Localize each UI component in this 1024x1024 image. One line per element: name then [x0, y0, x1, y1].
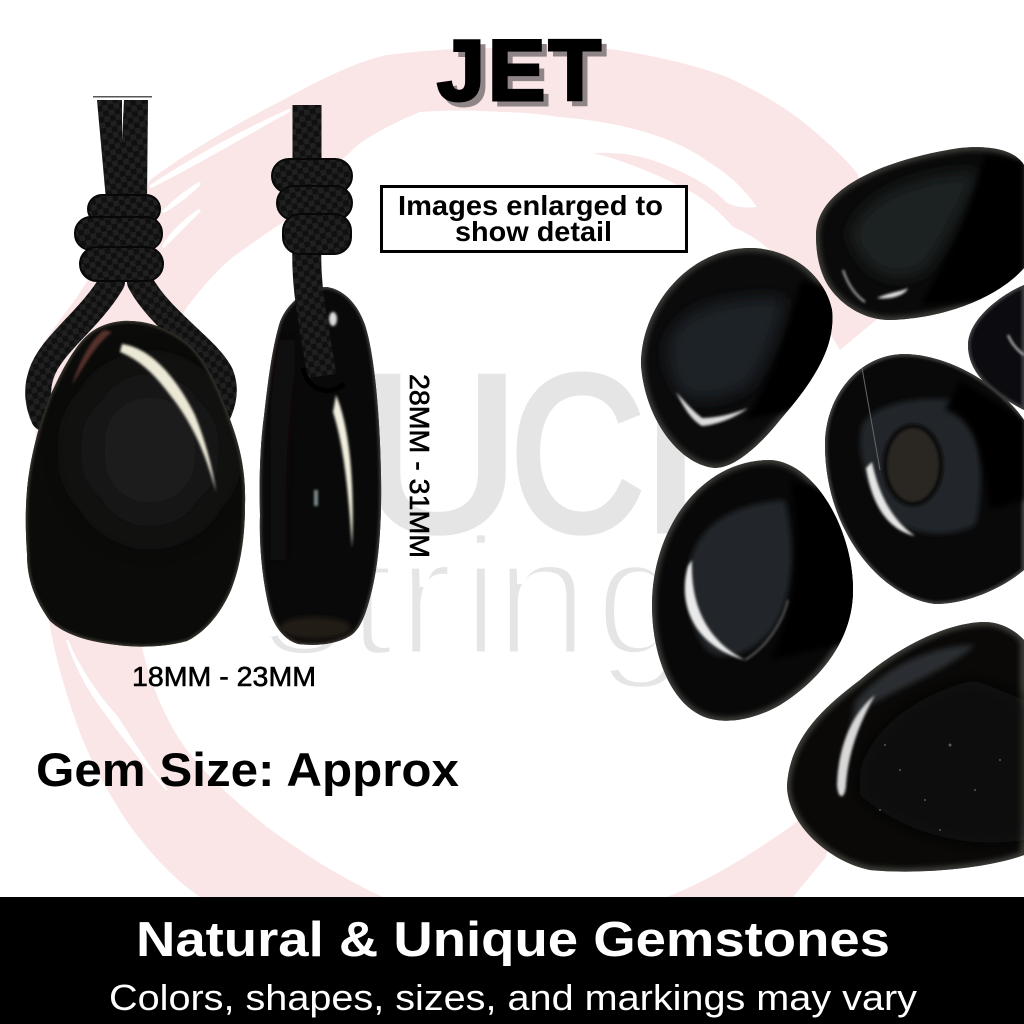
- side stone hole: [303, 368, 344, 391]
- height measurement: 28MM - 31MM: [404, 374, 435, 558]
- watermark logo letters: C: [510, 330, 645, 578]
- knot: [75, 195, 163, 281]
- pendant front view: [26, 96, 245, 647]
- footer heading: Natural & Unique Gemstones: [136, 913, 890, 967]
- title: JET: [437, 23, 601, 119]
- watermark logo letters: string: [262, 502, 690, 692]
- stone: bottom right: [787, 622, 1024, 872]
- width measurement: 18MM - 23MM: [132, 661, 316, 692]
- side stone upper highlight: [329, 312, 337, 326]
- note box: images enlarged: [382, 186, 686, 252]
- front stone highlight: [120, 344, 216, 492]
- stone: centre right: [825, 354, 1024, 604]
- side stone rim: [260, 287, 381, 645]
- side cord: [307, 105, 322, 376]
- footer banner: [0, 897, 1024, 1024]
- side stone highlight: [333, 395, 353, 548]
- stone: far right small: [968, 285, 1024, 410]
- title: JET: [442, 28, 606, 124]
- speckles: [879, 744, 1001, 831]
- watermark logo letters: [262, 330, 702, 692]
- side knot: [272, 159, 352, 254]
- front stone reddish reflection: [72, 330, 112, 385]
- note box: images enlarged: Images enlarged to: [398, 190, 663, 221]
- background pink brush ring: [36, 47, 900, 897]
- footer subheading: Colors, shapes, sizes, and markings may vary: [109, 977, 917, 1018]
- gem size label: Gem Size: Approx: [36, 743, 459, 796]
- pendant side view: [260, 105, 381, 645]
- stone: top right: [816, 147, 1024, 320]
- side stone left sheen: [276, 340, 290, 560]
- tumbled stones group: [641, 147, 1024, 872]
- side stone body: [260, 287, 381, 645]
- stone: lower left: [652, 460, 860, 721]
- hanging cords: [97, 100, 148, 200]
- top cord line: [93, 96, 152, 98]
- stone: left: [641, 248, 840, 468]
- stone sheen: [80, 370, 220, 530]
- stone rim: [26, 321, 245, 647]
- watermark logo letters: U: [359, 330, 519, 578]
- front stone body: [26, 321, 245, 647]
- watermark logo letters: I: [640, 330, 702, 578]
- note box: images enlarged: show detail: [455, 216, 612, 247]
- side stone white fleck: [314, 490, 318, 506]
- side stone warm bottom: [279, 617, 351, 639]
- cord loop: [38, 282, 224, 418]
- background white brush streaks: [67, 110, 290, 790]
